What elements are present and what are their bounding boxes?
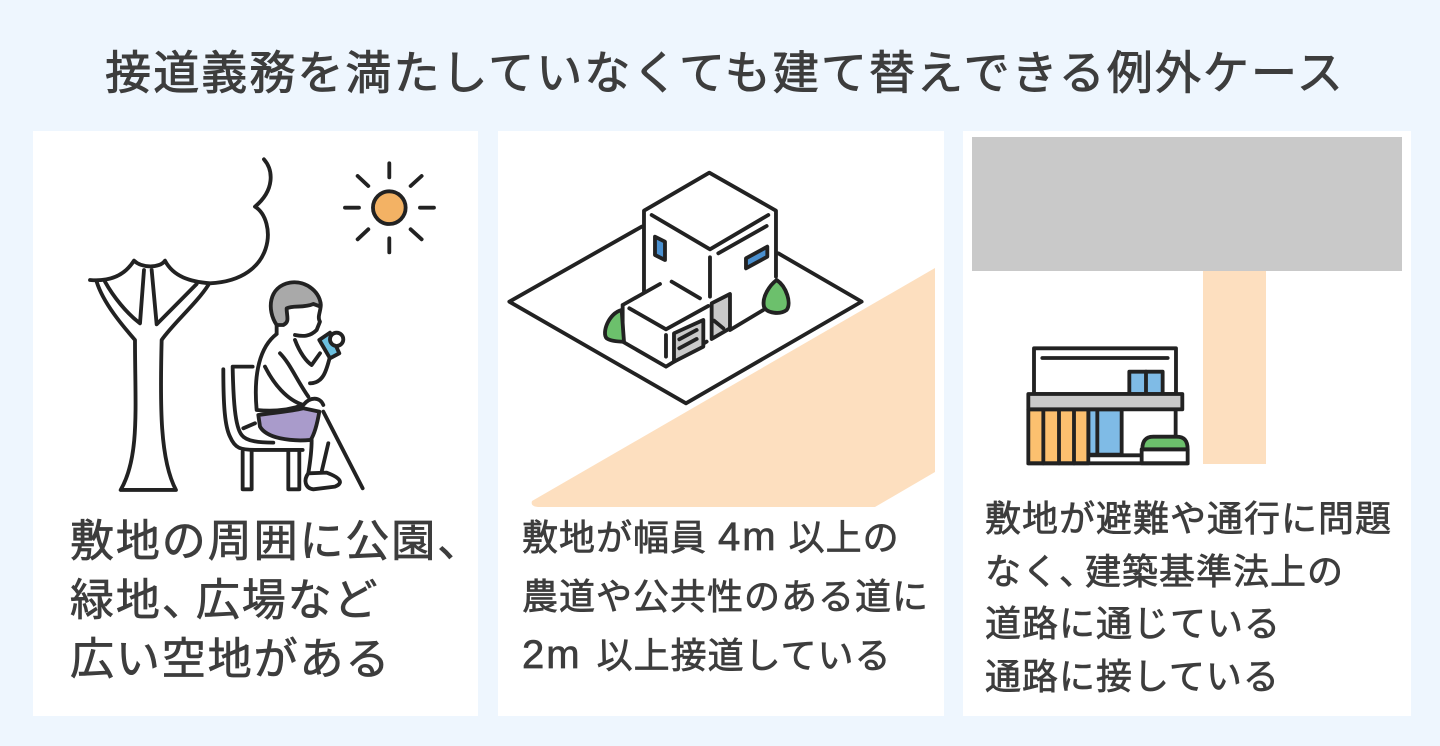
icon: tree (90, 159, 271, 490)
road: gray main road (972, 137, 1402, 271)
icon: sun (345, 163, 434, 252)
text: passage condition: 道路に通じている (985, 603, 1281, 644)
road: connecting passage (1203, 271, 1266, 464)
panel: open space card (33, 131, 478, 716)
text: farm road condition: 農道や公共性のある道に (522, 576, 929, 617)
text: farm road condition: 敷地が幅員 4m 以上の (522, 515, 900, 559)
text: farm road condition (522, 515, 929, 677)
text: farm road condition: 2m 以上接道している (522, 633, 892, 677)
text: open space condition: 緑地、広場など (70, 576, 379, 625)
panel: passage card (963, 131, 1411, 716)
text: open space condition: 敷地の周囲に公園、 (70, 517, 483, 566)
icon: seated person with cup and cane (223, 282, 363, 489)
text: open space condition (70, 517, 483, 684)
panel: farm road card (498, 131, 944, 716)
text: open space condition: 広い空地がある (70, 635, 391, 684)
title: 接道義務を満たしていなくても建て替えできる例外ケース (105, 47, 1345, 99)
text: passage condition: 通路に接している (985, 656, 1280, 696)
text: passage condition: なく、建築基準法上の (985, 550, 1344, 592)
road: diagonal farm road (532, 268, 935, 507)
text: passage condition: 敷地が避難や通行に問題 (985, 498, 1392, 539)
icon: isometric house on lot (509, 173, 862, 403)
text: passage condition (985, 498, 1392, 696)
icon: storefront house (1028, 348, 1188, 463)
